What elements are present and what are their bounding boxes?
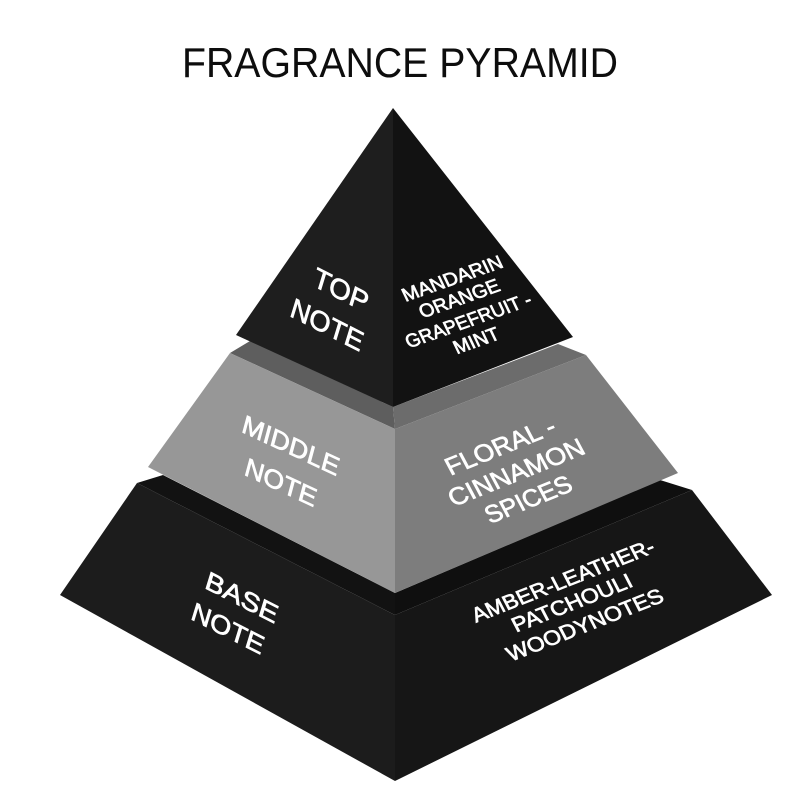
middle tier right face bbox=[395, 355, 678, 593]
top tier left face bbox=[236, 108, 393, 407]
middle tier left face bbox=[148, 353, 395, 593]
top note ingredients: MANDARIN bbox=[399, 252, 507, 306]
middle note ingredients bbox=[440, 413, 590, 529]
top note ingredients: ORANGE bbox=[416, 276, 504, 323]
top note label: TOP bbox=[310, 261, 372, 318]
top note ingredients: GRAPEFRUIT - bbox=[402, 290, 535, 353]
base note label: NOTE bbox=[188, 597, 267, 661]
top note label bbox=[287, 261, 372, 358]
top note ingredients bbox=[399, 252, 535, 359]
title: FRAGRANCE PYRAMID bbox=[182, 39, 618, 86]
middle note ingredients: FLORAL - bbox=[440, 413, 561, 481]
panel: base note tier bbox=[60, 475, 772, 781]
base note ingredients: WOODYNOTES bbox=[503, 585, 668, 666]
panel: top note tier bbox=[236, 108, 573, 407]
top tier right face bbox=[393, 108, 573, 407]
middle note label bbox=[239, 410, 342, 513]
base note ingredients: PATCHOULI bbox=[508, 570, 637, 637]
base tier ledge bbox=[137, 475, 692, 615]
top note label: NOTE bbox=[287, 291, 367, 358]
middle note ingredients: CINNAMON bbox=[443, 434, 590, 512]
base note ingredients: AMBER-LEATHER- bbox=[468, 536, 659, 627]
middle note ingredients: SPICES bbox=[480, 470, 577, 529]
middle note label: NOTE bbox=[242, 453, 320, 513]
middle tier ledge bbox=[230, 341, 586, 429]
base note label: BASE bbox=[202, 566, 281, 630]
base tier right face bbox=[395, 490, 772, 781]
base note ingredients bbox=[468, 536, 668, 666]
base tier left face bbox=[60, 483, 395, 781]
base note label bbox=[188, 566, 281, 661]
panel: middle note tier bbox=[148, 341, 678, 593]
top note ingredients: MINT bbox=[450, 324, 504, 359]
middle note label: MIDDLE bbox=[239, 410, 342, 482]
